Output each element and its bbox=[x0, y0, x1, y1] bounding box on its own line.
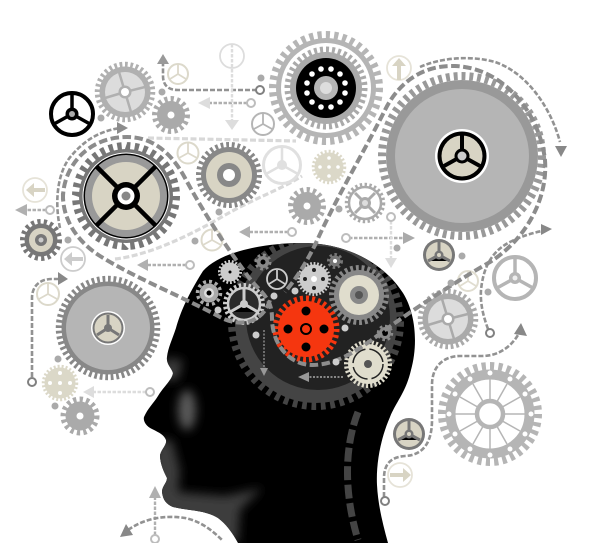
small brain gears bbox=[198, 254, 392, 340]
gear: outlined small centre bbox=[346, 184, 384, 222]
gear: top centre black bbox=[273, 35, 379, 141]
cream brain gear bbox=[346, 342, 390, 386]
brain wheel bbox=[267, 269, 287, 289]
light dashed connectors bbox=[115, 138, 302, 259]
brain gears bbox=[198, 238, 400, 406]
dotted brain gear bbox=[298, 264, 330, 294]
neck dashes bbox=[347, 412, 358, 540]
large dark gear bbox=[232, 238, 400, 406]
spoked brain gear bbox=[226, 286, 262, 322]
thin arrows: right side bbox=[381, 58, 567, 505]
gear: grey small centre bbox=[291, 190, 323, 222]
hub: beige right bottom bbox=[393, 418, 425, 450]
thin arrows: centre right bbox=[342, 213, 415, 268]
beige brain gear bbox=[332, 268, 386, 322]
gear: top left grey bbox=[98, 64, 152, 120]
wheel: grey right bbox=[494, 257, 536, 299]
grey screw dots bbox=[52, 74, 492, 410]
circled arrow icons bbox=[23, 44, 412, 487]
head silhouette bbox=[144, 243, 415, 543]
wheel: black top left bbox=[51, 93, 93, 135]
gear: grey lower left bbox=[64, 400, 96, 432]
hub: beige right top bbox=[423, 239, 455, 271]
dashed path: left outer arc with arrow bbox=[57, 122, 128, 228]
gear: left with cross spokes bbox=[76, 146, 176, 246]
wheel: pale centre bbox=[264, 146, 300, 184]
thin arrows: upper left bbox=[157, 44, 264, 130]
face shading bbox=[150, 358, 262, 543]
gear: beige small bbox=[314, 152, 344, 182]
thin arrows: below chin bbox=[120, 486, 222, 543]
gear: grey right bbox=[420, 292, 476, 346]
gear: large right bbox=[382, 76, 542, 236]
small pale wheels bbox=[37, 64, 478, 305]
small thin arrows in brain bbox=[260, 330, 343, 382]
main dashed paths bbox=[63, 66, 545, 365]
gear: spoked large lower right bbox=[442, 366, 538, 462]
gear: lower left large bbox=[59, 279, 157, 377]
gear: beige centre top bbox=[199, 145, 259, 205]
thin arrows: left column bbox=[15, 204, 296, 398]
gear: left small bbox=[22, 222, 60, 258]
red gear bbox=[276, 298, 336, 360]
gear: beige lower left bbox=[44, 366, 76, 400]
gear: small grey upper left bbox=[155, 99, 187, 131]
